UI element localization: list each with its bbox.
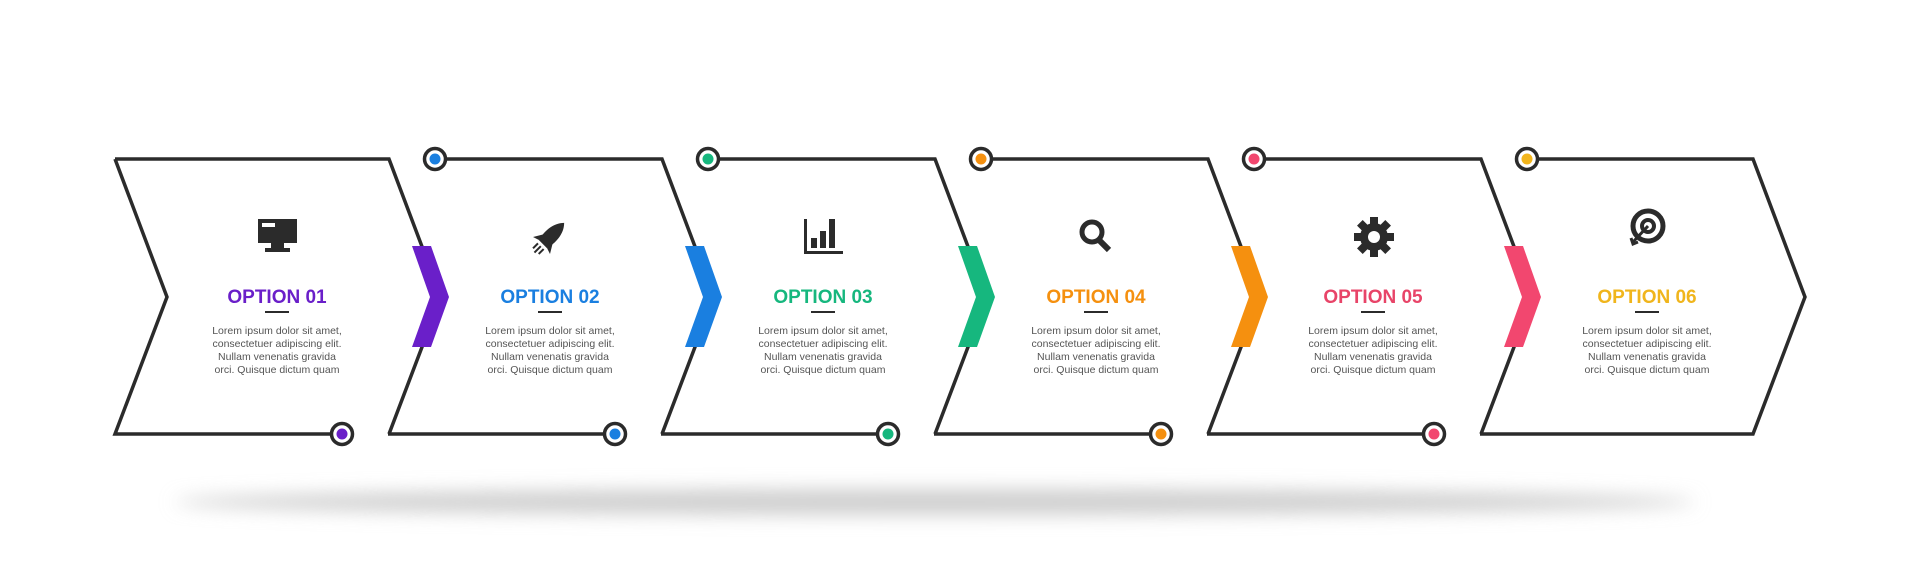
title 04: OPTION 04	[1046, 287, 1146, 308]
text 05: consectetuer adipiscing elit.	[1308, 338, 1438, 350]
icon: gear	[1354, 217, 1394, 257]
text 03: Nullam venenatis gravida	[764, 351, 882, 363]
panel: option 02	[485, 214, 615, 376]
text 02: orci. Quisque dictum quam	[488, 364, 613, 376]
icon: target	[1631, 211, 1663, 244]
text 06: orci. Quisque dictum quam	[1585, 364, 1710, 376]
text 02: Lorem ipsum dolor sit amet,	[485, 325, 615, 337]
title 03: OPTION 03	[773, 287, 873, 308]
text 02: consectetuer adipiscing elit.	[486, 338, 614, 350]
text 03: orci. Quisque dictum quam	[761, 364, 886, 376]
icon: magnifier	[1082, 222, 1109, 250]
shadow	[175, 489, 1695, 515]
text 05: orci. Quisque dictum quam	[1311, 364, 1436, 376]
chevron 1	[412, 246, 449, 347]
text 01: Lorem ipsum dolor sit amet,	[212, 325, 342, 337]
text 01: Nullam venenatis gravida	[218, 351, 336, 363]
text 06: consectetuer adipiscing elit.	[1582, 338, 1712, 350]
panel: option 01	[212, 219, 342, 376]
text 04: consectetuer adipiscing elit.	[1032, 338, 1160, 350]
icon: monitor	[258, 219, 297, 252]
text 05: Nullam venenatis gravida	[1314, 351, 1432, 363]
outline zigzag frames	[115, 159, 1805, 434]
panel: option 06	[1582, 211, 1712, 376]
title 02: OPTION 02	[500, 287, 600, 308]
text 01: orci. Quisque dictum quam	[215, 364, 340, 376]
text 01: consectetuer adipiscing elit.	[212, 338, 342, 350]
chevron 3	[958, 246, 995, 347]
text 02: Nullam venenatis gravida	[491, 351, 609, 363]
text 04: Nullam venenatis gravida	[1037, 351, 1155, 363]
text 04: Lorem ipsum dolor sit amet,	[1031, 325, 1161, 337]
text 03: Lorem ipsum dolor sit amet,	[758, 325, 888, 337]
title 06: OPTION 06	[1597, 287, 1697, 308]
text 04: orci. Quisque dictum quam	[1034, 364, 1159, 376]
icon: bar chart	[804, 219, 843, 254]
panel: option 04	[1031, 222, 1161, 376]
chevron 2	[685, 246, 722, 347]
text 06: Lorem ipsum dolor sit amet,	[1582, 325, 1712, 337]
text 06: Nullam venenatis gravida	[1588, 351, 1706, 363]
panel: option 03	[758, 219, 888, 376]
text 05: Lorem ipsum dolor sit amet,	[1308, 325, 1438, 337]
circle markers	[332, 148, 1538, 444]
title 01: OPTION 01	[227, 287, 327, 308]
text 03: consectetuer adipiscing elit.	[758, 338, 888, 350]
panel: option 05	[1308, 217, 1438, 376]
title 05: OPTION 05	[1323, 287, 1423, 308]
chevron 4	[1231, 246, 1268, 347]
chevron 5	[1504, 246, 1541, 347]
icon: rocket	[526, 214, 573, 261]
